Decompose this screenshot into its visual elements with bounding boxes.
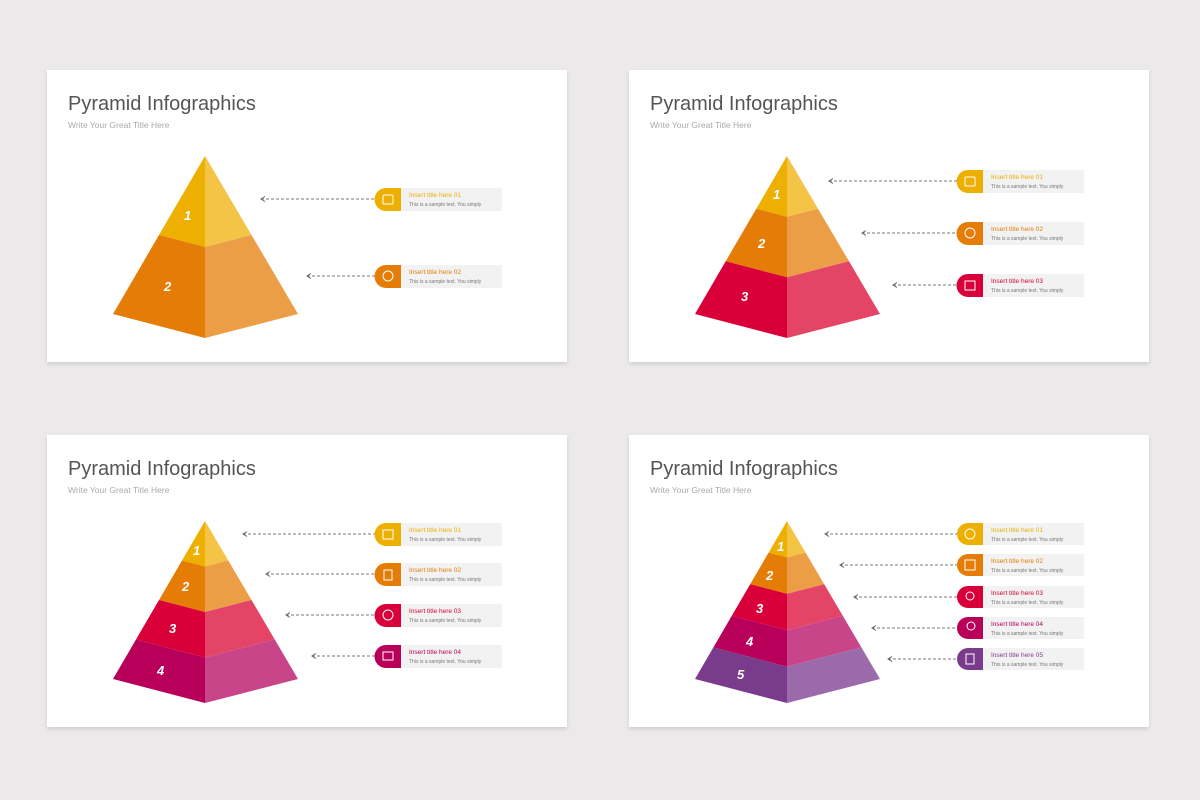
callout 1	[374, 523, 502, 546]
pyramid: 1	[773, 187, 780, 202]
callout 1	[957, 523, 1084, 545]
pyramid: 2	[163, 279, 172, 294]
callout 3: Insert title here 03	[409, 608, 461, 615]
callout 4: Insert title here 04	[409, 649, 461, 656]
callout 2: This is a sample text. You simply	[409, 279, 482, 285]
callout 3: This is a sample text. You simply	[991, 288, 1064, 294]
callout 2: Insert title here 02	[409, 269, 461, 276]
callout 3: Insert title here 03	[991, 278, 1043, 285]
arrow 1	[243, 533, 375, 535]
callout 2: This is a sample text. You simply	[991, 568, 1064, 574]
callout 2	[957, 554, 1084, 576]
callout 1: Insert title here 01	[991, 527, 1043, 534]
callout 3	[956, 274, 1084, 297]
callout 3	[374, 604, 502, 627]
callout 4: This is a sample text. You simply	[409, 659, 482, 665]
pyramid: 2	[757, 236, 766, 251]
panel: 4-level pyramid	[47, 435, 567, 727]
subtitle: Write Your Great Title Here	[68, 485, 170, 495]
arrow 2	[307, 275, 375, 277]
pyramid: 4	[156, 663, 165, 678]
title: Pyramid Infographics	[650, 93, 838, 115]
callout 1: This is a sample text. You simply	[991, 537, 1064, 543]
callout 3	[957, 586, 1084, 608]
callout 2: This is a sample text. You simply	[991, 236, 1064, 242]
subtitle: Write Your Great Title Here	[650, 485, 752, 495]
arrow 3	[854, 596, 957, 598]
callout 2	[374, 563, 502, 586]
callout 2: This is a sample text. You simply	[409, 577, 482, 583]
callout 5: Insert title here 05	[991, 652, 1043, 659]
callout 2: Insert title here 02	[991, 226, 1043, 233]
callout 1: Insert title here 01	[991, 174, 1043, 181]
pyramid: 1	[193, 543, 200, 558]
callout 1: Insert title here 01	[409, 527, 461, 534]
pyramid: 1	[777, 539, 784, 554]
callout 2	[374, 265, 502, 288]
arrow 4	[872, 627, 957, 629]
pyramid	[695, 521, 880, 703]
arrow 3	[893, 284, 957, 286]
arrow 1	[261, 198, 375, 200]
panel: 2-level pyramid	[47, 70, 567, 362]
callout 2	[956, 222, 1084, 245]
panel: 5-level pyramid	[629, 435, 1149, 727]
arrow 2	[266, 573, 375, 575]
callout 1: Insert title here 01	[409, 192, 461, 199]
pyramid: 2	[181, 579, 190, 594]
pyramid	[113, 156, 298, 338]
callout 1: This is a sample text. You simply	[409, 537, 482, 543]
callout 3: This is a sample text. You simply	[991, 600, 1064, 606]
arrow 3	[286, 614, 375, 616]
callout 1: This is a sample text. You simply	[409, 202, 482, 208]
pyramid: 3	[756, 601, 764, 616]
callout 5	[957, 648, 1084, 670]
callout 1	[956, 170, 1084, 193]
callout 1	[374, 188, 502, 211]
pyramid	[695, 156, 880, 338]
arrow 5	[888, 658, 957, 660]
arrow 2	[840, 564, 957, 566]
pyramid: 1	[184, 208, 191, 223]
arrow 1	[825, 533, 957, 535]
callout 3: This is a sample text. You simply	[409, 618, 482, 624]
pyramid: 3	[741, 289, 749, 304]
title: Pyramid Infographics	[68, 93, 256, 115]
pyramid: 4	[745, 634, 754, 649]
callout 3: Insert title here 03	[991, 590, 1043, 597]
pyramid	[113, 521, 298, 703]
title: Pyramid Infographics	[650, 458, 838, 480]
callout 4	[957, 617, 1084, 639]
arrow 4	[312, 655, 375, 657]
panel: 3-level pyramid	[629, 70, 1149, 362]
pyramid: 3	[169, 621, 177, 636]
pyramid: 5	[737, 667, 745, 682]
arrow 2	[862, 232, 957, 234]
subtitle: Write Your Great Title Here	[650, 120, 752, 130]
callout 4: Insert title here 04	[991, 621, 1043, 628]
callout 4	[374, 645, 502, 668]
callout 5: This is a sample text. You simply	[991, 662, 1064, 668]
subtitle: Write Your Great Title Here	[68, 120, 170, 130]
callout 2: Insert title here 02	[409, 567, 461, 574]
arrow 1	[829, 180, 957, 182]
title: Pyramid Infographics	[68, 458, 256, 480]
pyramid: 2	[765, 568, 774, 583]
callout 4: This is a sample text. You simply	[991, 631, 1064, 637]
callout 1: This is a sample text. You simply	[991, 184, 1064, 190]
callout 2: Insert title here 02	[991, 558, 1043, 565]
